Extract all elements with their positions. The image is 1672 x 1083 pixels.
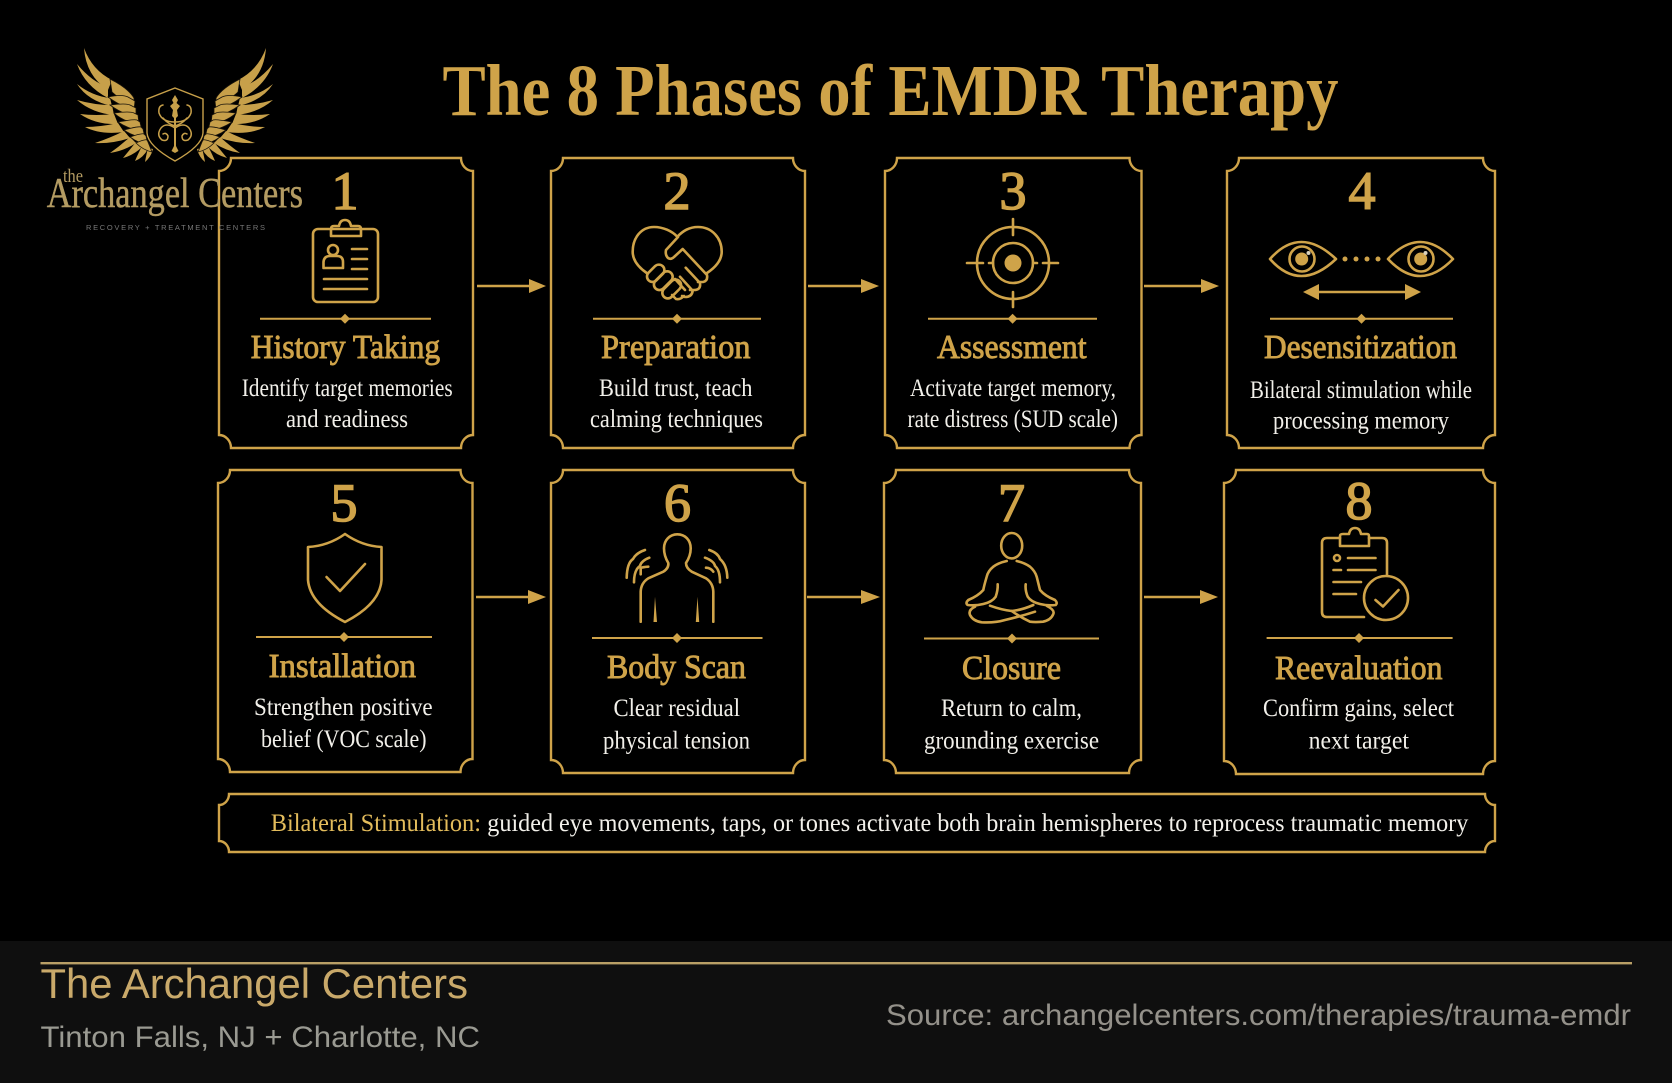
panel: phase 6 Body Scan: 6 bbox=[664, 473, 691, 533]
panel: phase 2 Preparation bbox=[551, 158, 805, 448]
panel: phase 3 Assessment: 3 bbox=[1000, 161, 1026, 221]
panel: phase 8 Reevaluation bbox=[1224, 470, 1495, 774]
panel: phase 3 Assessment: Activate target memory, bbox=[910, 375, 1116, 402]
footer locations: Tinton Falls, NJ + Charlotte, NC bbox=[40, 1021, 480, 1054]
panel: phase 1 History Taking bbox=[219, 158, 473, 448]
icon: eyes with bilateral arrow bbox=[1270, 242, 1453, 300]
panel: phase 1 History Taking: History Taking bbox=[251, 329, 440, 366]
icon: meditating figure bbox=[966, 533, 1057, 622]
icon: shield with check bbox=[308, 534, 382, 622]
arrow: 7 to 8 bbox=[1144, 590, 1218, 604]
icon: body with tension waves bbox=[627, 534, 727, 622]
callout: bilateral stimulation: Bilateral Stimulation: bbox=[271, 810, 481, 837]
icon: right wing bbox=[197, 48, 273, 162]
panel: phase 1 History Taking: and readiness bbox=[286, 406, 408, 433]
panel: phase 2 Preparation: Preparation bbox=[601, 329, 750, 366]
panel: phase 7 Closure bbox=[884, 470, 1141, 773]
icon: target bbox=[967, 219, 1058, 307]
panel: phase 4 Desensitization: Bilateral stimulation while bbox=[1250, 377, 1472, 404]
footer band bbox=[0, 941, 1672, 1083]
panel: phase 5 Installation: 5 bbox=[330, 473, 358, 533]
arrow: 2 to 3 bbox=[808, 279, 879, 293]
logo: The Archangel Centers: RECOVERY + TREATMENT CENTERS bbox=[86, 223, 265, 232]
arrow: 6 to 7 bbox=[807, 590, 880, 604]
logo: The Archangel Centers bbox=[47, 48, 303, 232]
panel: phase 7 Closure: grounding exercise bbox=[924, 728, 1099, 754]
callout: bilateral stimulation bbox=[219, 794, 1495, 852]
panel: phase 4 Desensitization: processing memory bbox=[1273, 408, 1449, 434]
footer organisation name: The Archangel Centers bbox=[40, 960, 468, 1007]
icon: clipboard with checkmark bbox=[1322, 528, 1408, 620]
panel: phase 6 Body Scan bbox=[551, 470, 805, 773]
logo: The Archangel Centers: the bbox=[63, 166, 83, 187]
arrow: 5 to 6 bbox=[476, 590, 546, 604]
icon: clipboard with person bbox=[313, 220, 378, 302]
panel: phase 5 Installation bbox=[218, 470, 472, 772]
panel: phase 2 Preparation: 2 bbox=[664, 161, 690, 221]
icon: left wing bbox=[77, 48, 153, 162]
panel: phase 8 Reevaluation: 8 bbox=[1346, 471, 1372, 531]
panel: phase 2 Preparation: calming techniques bbox=[590, 406, 763, 433]
arrow: 3 to 4 bbox=[1144, 279, 1219, 293]
panel: phase 8 Reevaluation: Confirm gains, select bbox=[1263, 695, 1454, 722]
panel: phase 3 Assessment: rate distress (SUD scale) bbox=[908, 406, 1118, 433]
title: The 8 Phases of EMDR Therapy bbox=[442, 50, 1338, 131]
panel: phase 4 Desensitization: 4 bbox=[1348, 161, 1376, 221]
icon: crest shield bbox=[147, 88, 203, 161]
panel: phase 4 Desensitization: Desensitization bbox=[1264, 329, 1457, 366]
panel: phase 8 Reevaluation: next target bbox=[1309, 728, 1409, 754]
panel: phase 3 Assessment bbox=[885, 158, 1142, 448]
panel: phase 5 Installation: belief (VOC scale) bbox=[261, 726, 426, 753]
panel: phase 3 Assessment: Assessment bbox=[937, 329, 1087, 366]
panel: phase 7 Closure: 7 bbox=[998, 473, 1025, 533]
panel: phase 6 Body Scan: Clear residual bbox=[614, 695, 740, 722]
panel: phase 1 History Taking: 1 bbox=[332, 161, 358, 221]
panel: phase 5 Installation: Strengthen positive bbox=[254, 694, 433, 721]
panel: phase 7 Closure: Return to calm, bbox=[941, 695, 1082, 722]
callout: bilateral stimulation: guided eye movements, taps, or tones activate both brain hemispheres to reprocess traumatic memory bbox=[487, 810, 1469, 837]
panel: phase 8 Reevaluation: Reevaluation bbox=[1275, 650, 1442, 687]
logo: The Archangel Centers: Archangel Centers bbox=[47, 171, 303, 217]
panel: phase 1 History Taking: Identify target memories bbox=[242, 375, 453, 402]
footer source: Source: archangelcenters.com/therapies/trauma-emdr bbox=[886, 999, 1631, 1032]
panel: phase 6 Body Scan: physical tension bbox=[603, 728, 750, 754]
icon: heart handshake bbox=[633, 227, 722, 301]
panel: phase 5 Installation: Installation bbox=[269, 648, 416, 685]
panel: phase 7 Closure: Closure bbox=[962, 650, 1061, 687]
arrow: 1 to 2 bbox=[477, 279, 546, 293]
panel: phase 2 Preparation: Build trust, teach bbox=[599, 375, 753, 402]
panel: phase 6 Body Scan: Body Scan bbox=[607, 649, 746, 686]
panel: phase 4 Desensitization bbox=[1227, 158, 1495, 448]
